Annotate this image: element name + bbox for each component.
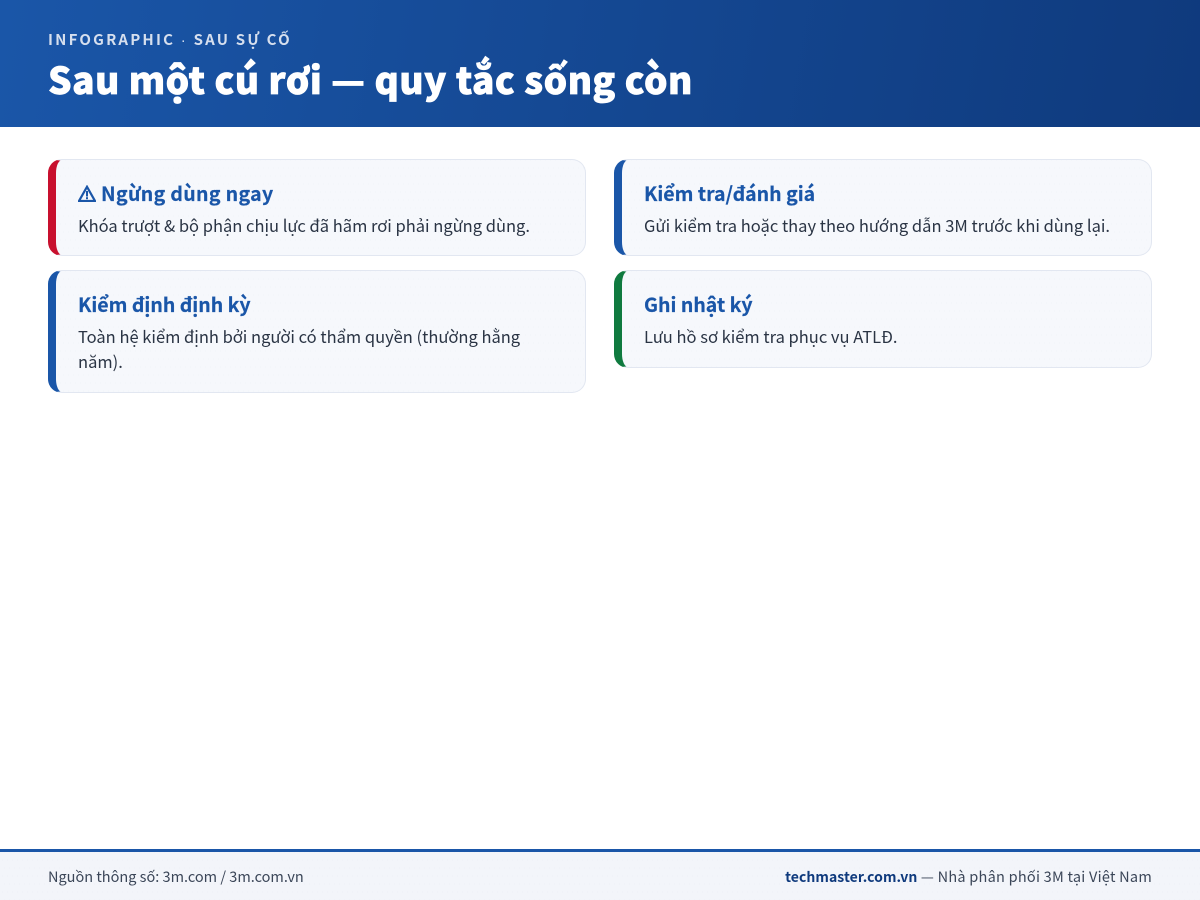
text: certification: năm). [78, 349, 123, 373]
heading: log: Ghi nhật ký [644, 289, 753, 318]
heading: inspect: Kiểm tra/đánh giá [644, 178, 815, 207]
text: inspect: Gửi kiểm tra hoặc thay theo hướng dẫn 3M trước khi dùng lại. [644, 213, 1110, 237]
footer [0, 849, 1200, 900]
text: log: Lưu hồ sơ kiểm tra phục vụ ATLĐ. [644, 324, 897, 348]
icon: warning triangle [78, 185, 96, 202]
panel: periodic certification [48, 270, 586, 393]
panel: keep a log [614, 270, 1152, 368]
text: stop using: Khóa trượt & bộ phận chịu lực đã hãm rơi phải ngừng dùng. [78, 213, 530, 237]
eyebrow label: INFOGRAPHIC · SAU SỰ CỐ [48, 29, 292, 50]
distributor note: techmaster.com.vn — Nhà phân phối 3M tại Việt Nam [785, 866, 1152, 887]
panel: inspect and assess [614, 159, 1152, 256]
panel: stop using immediately [48, 159, 586, 256]
source note: Nguồn thông số: 3m.com / 3m.com.vn [48, 866, 304, 887]
text: certification [78, 324, 520, 373]
title: Sau một cú rơi — quy tắc sống còn [48, 51, 693, 105]
heading: stop using: Ngừng dùng ngay [101, 178, 273, 207]
text: certification: Toàn hệ kiểm định bởi người có thẩm quyền (thường hằng [78, 324, 520, 348]
header banner [0, 0, 1200, 127]
heading: certification: Kiểm định định kỳ [78, 289, 251, 318]
